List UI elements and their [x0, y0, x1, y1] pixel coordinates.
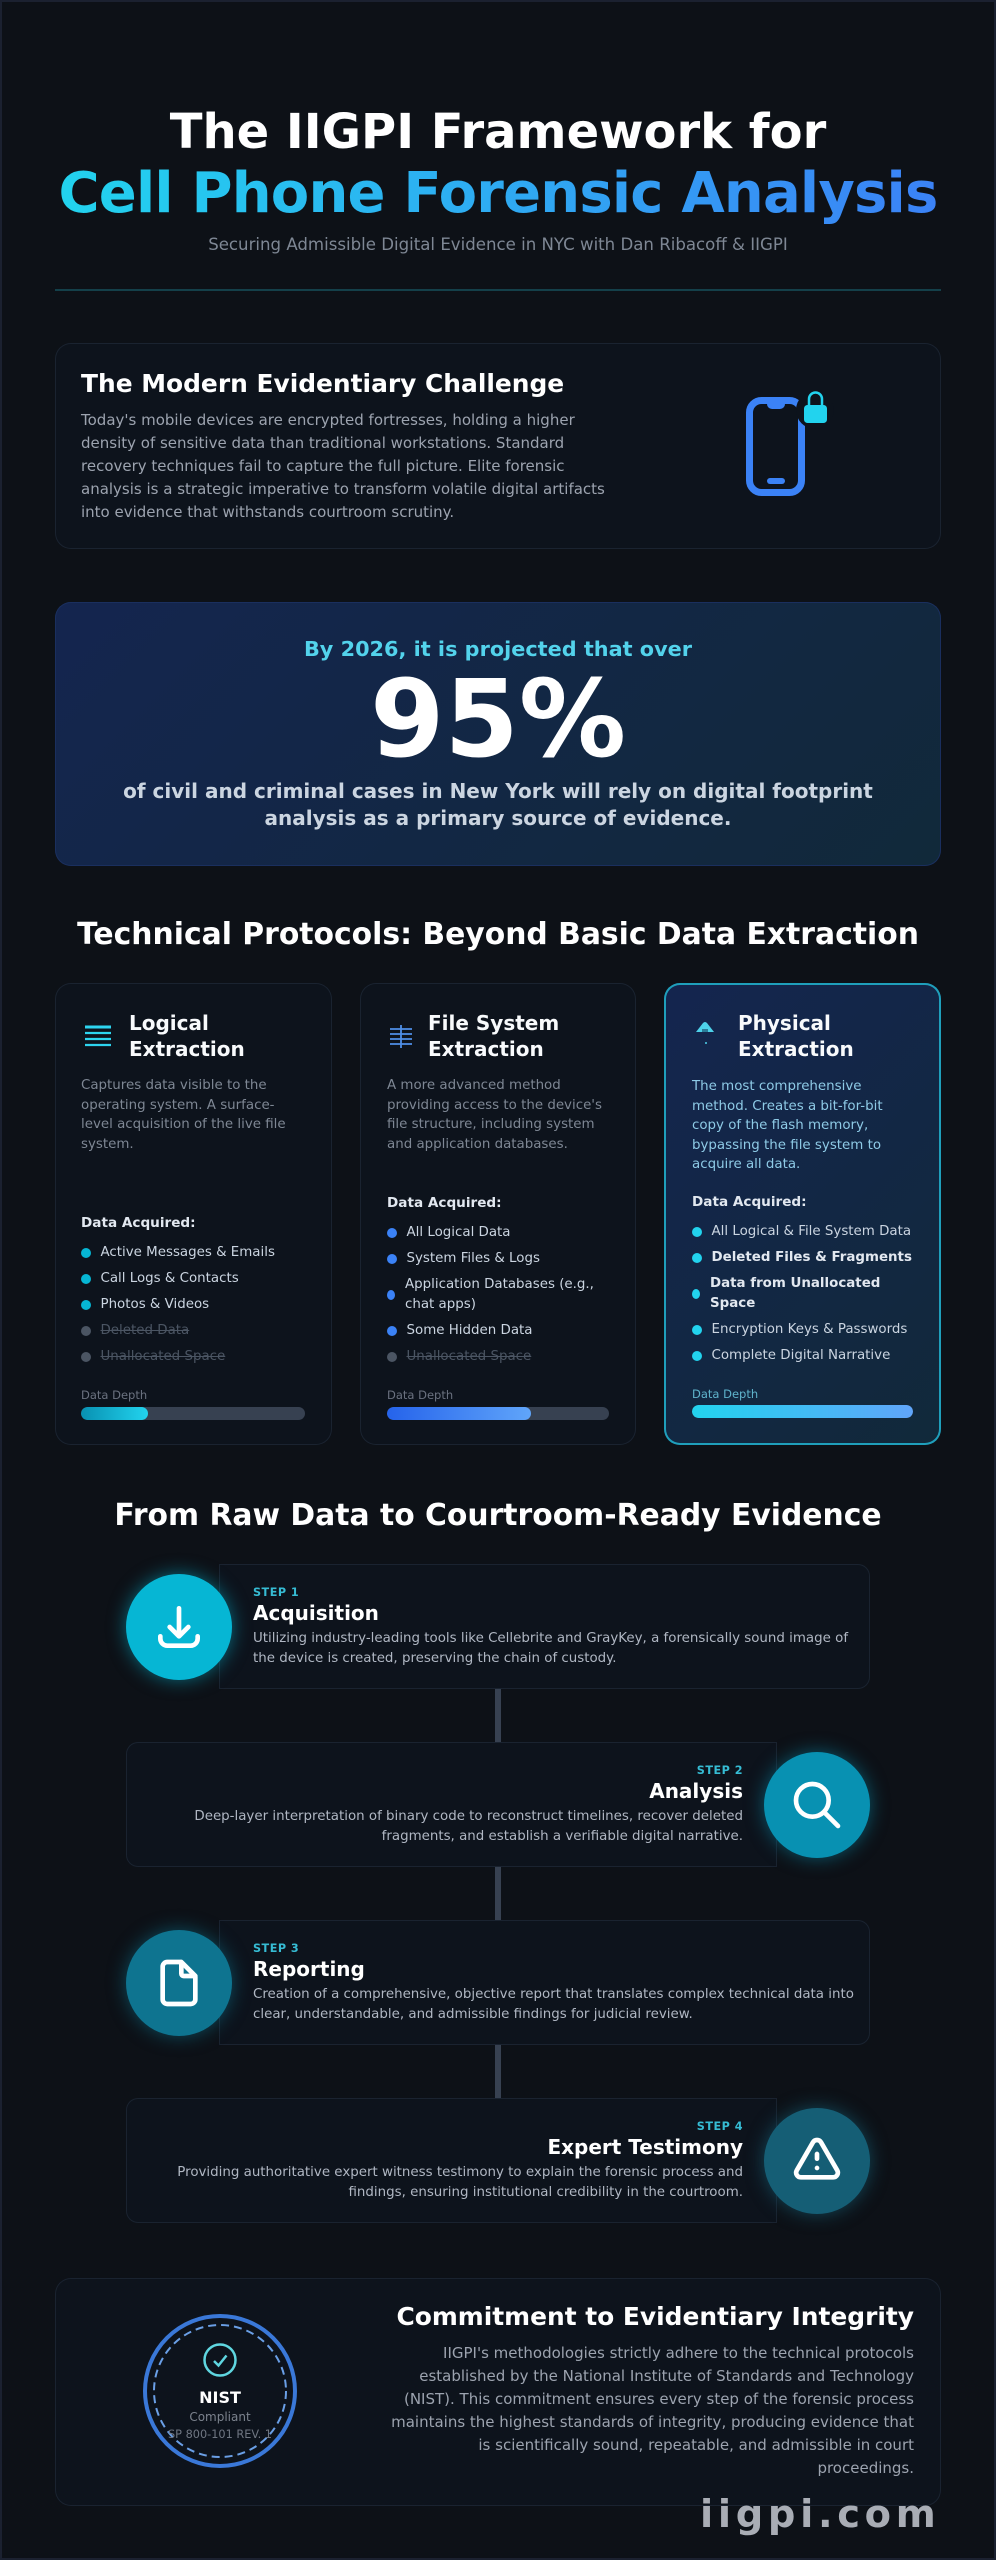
panel: 95% statistic: [55, 602, 941, 866]
title: The IIGPI Framework for: [170, 104, 826, 160]
data item: [692, 1274, 880, 1314]
icon: step 2 search: [764, 1752, 870, 1858]
data item: [387, 1275, 594, 1315]
data item: chat apps): [405, 1297, 476, 1312]
step body: [177, 2165, 743, 2200]
data item: Photos & Videos: [100, 1297, 209, 1312]
step label: STEP 1: [253, 1586, 299, 1599]
body text: density of sensitive data than traditional workstations. Standard: [81, 434, 564, 452]
title highlight: Cell Phone Forensic Analysis: [58, 161, 938, 226]
body text: analysis is a strategic imperative to transform volatile digital artifacts: [81, 480, 605, 498]
data depth label: Data Depth: [692, 1387, 758, 1401]
data item: System Files & Logs: [406, 1251, 540, 1266]
data item: Complete Digital Narrative: [712, 1348, 890, 1363]
data item: Encryption Keys & Passwords: [712, 1322, 907, 1337]
icon: lines: [85, 1026, 111, 1046]
section heading: technical protocols: Technical Protocols: Beyond Basic Data Extraction: [77, 917, 919, 952]
step body: findings, ensuring institutional credibility in the courtroom.: [348, 2185, 743, 2200]
panel: the modern evidentiary challenge: [55, 343, 941, 549]
step title: Analysis: [649, 1779, 743, 1803]
description: [81, 1078, 286, 1152]
description: method. Creates a bit-for-bit: [692, 1099, 883, 1114]
data item: excluded: Deleted Data: [100, 1323, 189, 1338]
stat lead-in: By 2026, it is projected that over: [304, 637, 692, 661]
icon: chip: [696, 1022, 714, 1044]
description: [387, 1078, 602, 1152]
body text: [80, 410, 605, 520]
badge inner dashed ring: [153, 2324, 287, 2458]
icon: step 1 download: [126, 1574, 232, 1680]
data item: Application Databases (e.g.,: [405, 1277, 594, 1292]
body text: into evidence that withstands courtroom scrutiny.: [81, 502, 454, 520]
data item: All Logical Data: [406, 1225, 511, 1240]
panel: file system extraction: [360, 983, 636, 1445]
data item: excluded: Unallocated Space: [100, 1349, 225, 1364]
description: [692, 1079, 883, 1172]
data item: Some Hidden Data: [406, 1323, 532, 1338]
card title: Extraction: [129, 1036, 245, 1060]
panel: commitment to evidentiary integrity: [55, 2278, 941, 2506]
body text: maintains the highest standards of integrity, producing evidence that: [391, 2413, 914, 2431]
data depth bar: [692, 1405, 913, 1418]
card title: Extraction: [738, 1036, 854, 1060]
heading: Commitment to Evidentiary Integrity: [396, 2302, 914, 2331]
step 1 card: [219, 1564, 870, 1689]
stat description: of civil and criminal cases in New York will rely on digital footprint: [123, 779, 873, 803]
card title: [428, 1010, 559, 1060]
description: system.: [81, 1137, 134, 1152]
description: level acquisition of the live file: [81, 1117, 286, 1132]
step title: Expert Testimony: [547, 2135, 743, 2159]
body text: IIGPI's methodologies strictly adhere to the technical protocols: [443, 2344, 914, 2362]
connector: [495, 2045, 501, 2098]
step 3 card: [219, 1920, 870, 2045]
body text: is scientifically sound, repeatable, and admissible in court: [478, 2436, 914, 2454]
NIST badge: [143, 2314, 297, 2468]
watermark: iigpi.com: iigpi.com: [700, 2492, 940, 2537]
body text: Today's mobile devices are encrypted fortresses, holding a higher: [81, 410, 575, 428]
panel: logical extraction: [55, 983, 332, 1445]
body text: [391, 2344, 914, 2477]
heading: The Modern Evidentiary Challenge: [81, 369, 564, 398]
badge standard: SP 800-101 REV. 1: [168, 2428, 272, 2441]
card title: [738, 1010, 854, 1060]
subtitle: Securing Admissible Digital Evidence in NYC with Dan Ribacoff & IIGPI: [208, 235, 788, 254]
card title: [129, 1010, 245, 1060]
data depth label: Data Depth: [387, 1388, 453, 1402]
step 2 card: [126, 1742, 777, 1867]
description: acquire all data.: [692, 1157, 800, 1172]
step body: fragments, and establish a verifiable digital narrative.: [382, 1829, 743, 1844]
step label: STEP 3: [253, 1942, 299, 1955]
stat description: analysis as a primary source of evidence.: [265, 806, 731, 830]
icon: check circle: [203, 2343, 237, 2377]
data depth bar: [387, 1407, 609, 1420]
step body: clear, understandable, and admissible findings for judicial review.: [253, 2007, 693, 2022]
data item: Space: [710, 1296, 755, 1311]
step body: the device is created, preserving the chain of custody.: [253, 1651, 616, 1666]
description: Captures data visible to the: [81, 1078, 267, 1093]
data depth label: Data Depth: [81, 1388, 147, 1402]
body text: recovery techniques fail to capture the full picture. Elite forensic: [81, 456, 565, 474]
data item: Active Messages & Emails: [100, 1245, 275, 1260]
body text: proceedings.: [817, 2459, 914, 2477]
step body: Creation of a comprehensive, objective report that translates complex technical data into: [253, 1987, 854, 2002]
badge status: Compliant: [189, 2410, 251, 2424]
description: The most comprehensive: [692, 1079, 862, 1094]
icon: locked phone: [746, 391, 827, 496]
step label: STEP 2: [697, 1764, 743, 1777]
data item: Data from Unallocated: [710, 1276, 880, 1291]
icon: step 3 document: [126, 1930, 232, 2036]
connector: [495, 1689, 501, 1742]
step title: Reporting: [253, 1957, 365, 1981]
data acquired label: Data Acquired:: [81, 1215, 196, 1231]
body text: established by the National Institute of Standards and Technology: [419, 2367, 914, 2385]
step 4 card: [126, 2098, 777, 2223]
description: providing access to the device's: [387, 1098, 602, 1113]
icon: step 4 warning: [764, 2108, 870, 2214]
data acquired label: Data Acquired:: [387, 1195, 502, 1211]
step body: Deep-layer interpretation of binary code to reconstruct timelines, recover deleted: [194, 1809, 743, 1824]
description: bypassing the file system to: [692, 1138, 881, 1153]
card title: Extraction: [428, 1036, 544, 1060]
section heading: process: From Raw Data to Courtroom-Ready Evidence: [114, 1498, 882, 1533]
step body: [253, 1987, 854, 2022]
data item: Deleted Files & Fragments: [712, 1250, 912, 1265]
step body: [253, 1631, 848, 1666]
icon: database lines: [390, 1025, 412, 1048]
panel: physical extraction: [664, 983, 941, 1445]
step title: Acquisition: [253, 1601, 379, 1625]
data item: Call Logs & Contacts: [100, 1271, 239, 1286]
data acquired label: Data Acquired:: [692, 1194, 807, 1210]
stat number: 95%: [370, 658, 626, 782]
step body: Utilizing industry-leading tools like Cellebrite and GrayKey, a forensically sound image of: [253, 1631, 848, 1646]
data depth bar: [81, 1407, 305, 1420]
description: and application databases.: [387, 1137, 568, 1152]
description: file structure, including system: [387, 1117, 595, 1132]
step body: [194, 1809, 743, 1844]
data item: excluded: Unallocated Space: [406, 1349, 531, 1364]
description: A more advanced method: [387, 1078, 561, 1093]
card title: Physical: [738, 1010, 831, 1034]
body text: (NIST). This commitment ensures every step of the forensic process: [404, 2390, 914, 2408]
description: copy of the flash memory,: [692, 1118, 868, 1133]
description: operating system. A surface-: [81, 1098, 275, 1113]
card title: File System: [428, 1010, 559, 1034]
connector: [495, 1867, 501, 1920]
step label: STEP 4: [697, 2120, 743, 2133]
badge title: NIST: [199, 2388, 241, 2407]
card title: Logical: [129, 1010, 209, 1034]
data item: All Logical & File System Data: [712, 1224, 911, 1239]
stat description: [123, 779, 873, 830]
step body: Providing authoritative expert witness testimony to explain the forensic process and: [177, 2165, 743, 2180]
